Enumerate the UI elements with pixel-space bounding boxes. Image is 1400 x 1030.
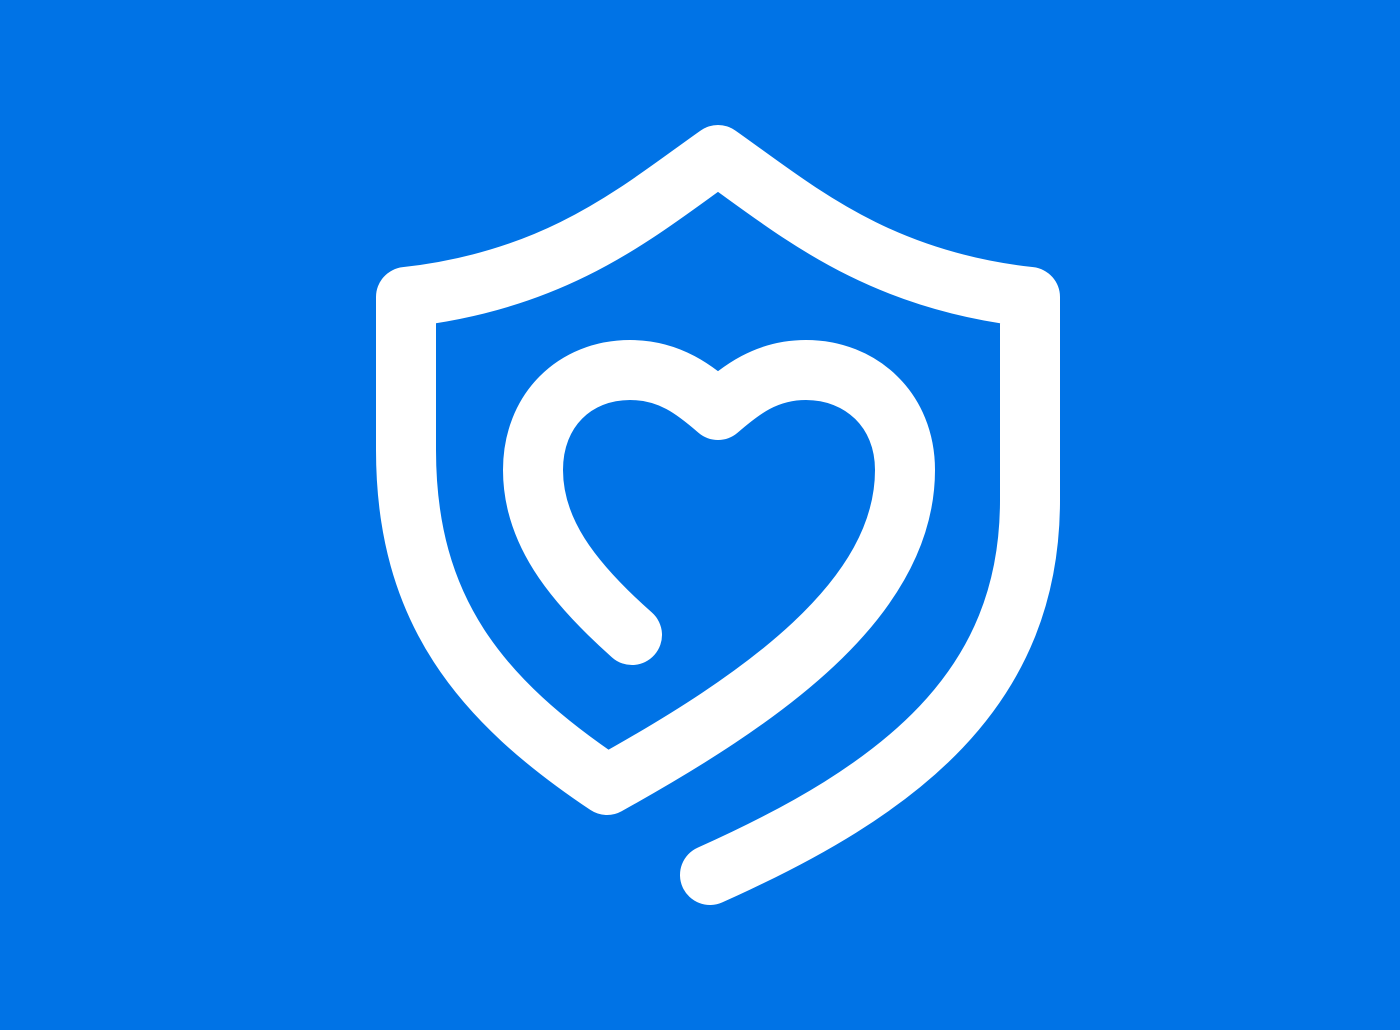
icon: continuous shield and heart outline bbox=[406, 155, 1030, 875]
